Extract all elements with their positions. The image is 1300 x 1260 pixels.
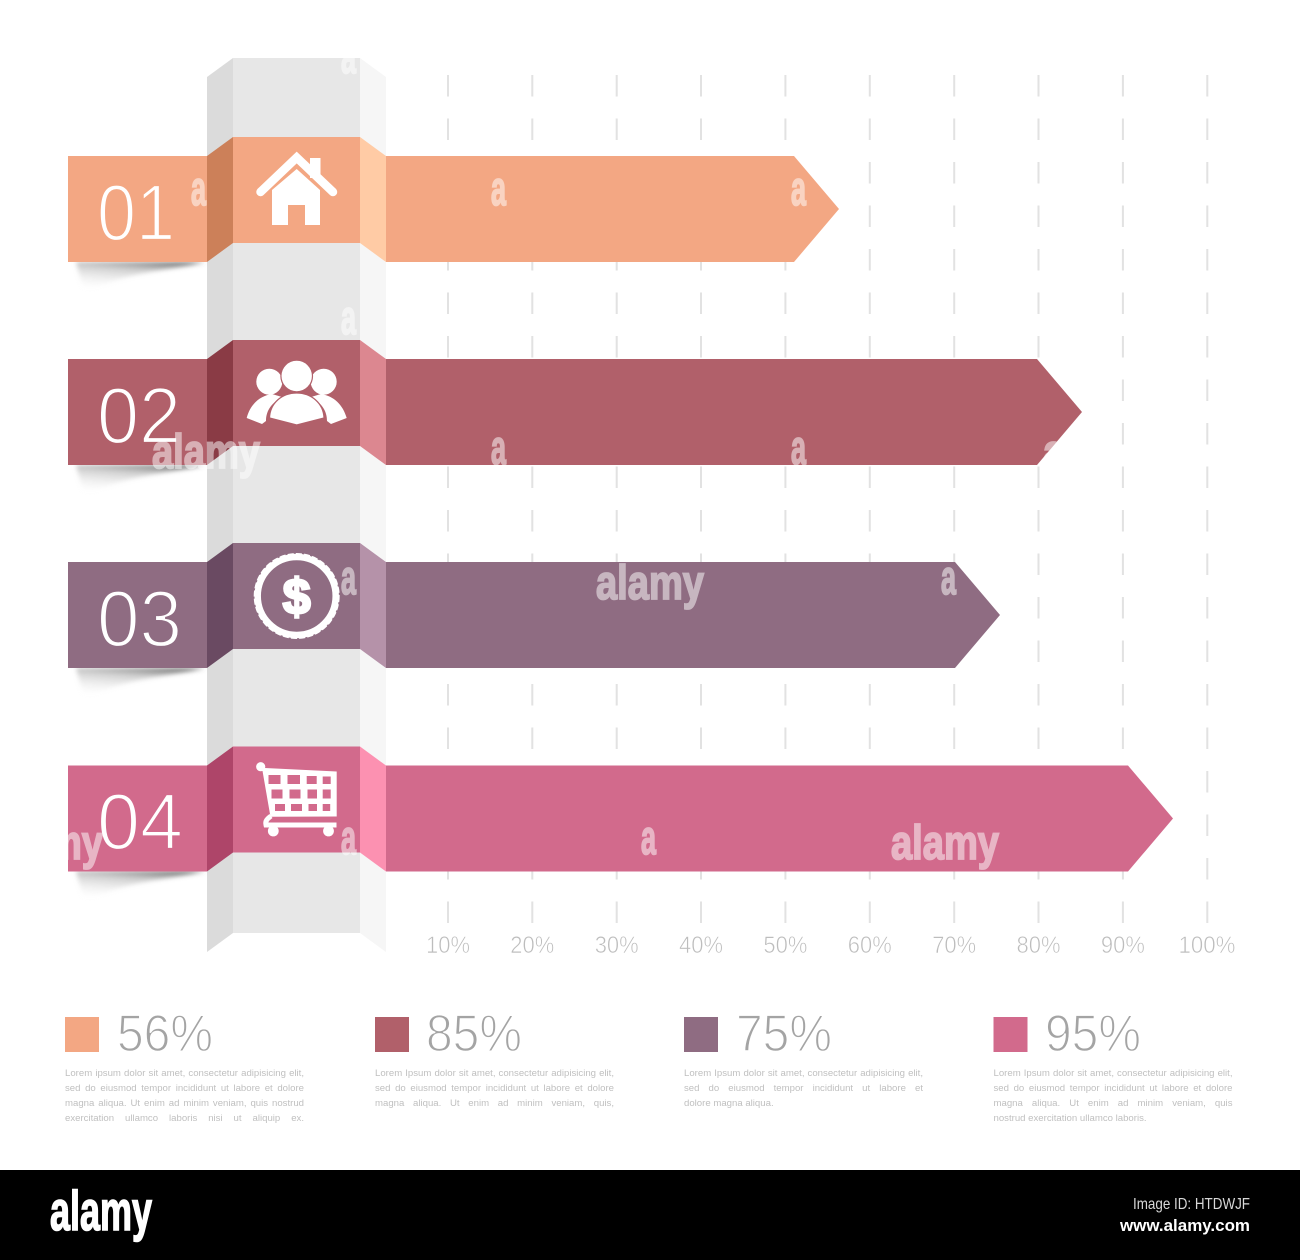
watermark overlay: alamy <box>596 557 704 610</box>
arrow bar 75% <box>386 562 1000 668</box>
icon panel <box>233 137 360 243</box>
text block: 56% description: Lorem ipsum dolor sit amet, consectetur adipisicing elit, <box>65 1068 304 1079</box>
watermark overlay: a <box>341 292 356 345</box>
text block: 95% description: Lorem Ipsum dolor sit amet, consectetur adipisicing elit, <box>994 1068 1232 1079</box>
text block: 75% description: sed do eiusmod tempor incididunt ut labore et <box>684 1083 923 1094</box>
number tab 03 <box>68 562 207 668</box>
icon panel <box>233 340 360 446</box>
text block: 56% description: magna aliqua. Ut enim ad minim veniam, quis nostrud <box>65 1098 304 1109</box>
watermark overlay: a <box>491 422 506 475</box>
watermark overlay: a <box>641 812 656 865</box>
shadow under ribbon 01 <box>76 262 205 292</box>
icon: house <box>260 158 333 225</box>
left fold <box>207 137 233 262</box>
text block: 56% description: exercitation ullamco laboris nisi ut aliquip ex. <box>65 1113 304 1124</box>
watermark overlay: a <box>191 163 206 216</box>
left fold <box>207 543 233 668</box>
arrow bar 56% <box>386 156 839 262</box>
watermark overlay: a <box>791 163 806 216</box>
arrow bar 85% <box>386 359 1082 465</box>
text block: 95% description: magna aliqua. Ut enim ad minim veniam, quis <box>994 1098 1232 1109</box>
watermark overlay: alamy <box>1043 426 1151 479</box>
text block: 95% description <box>994 1068 1232 1124</box>
number 02: 02 <box>97 371 181 460</box>
watermark overlay: alamy <box>891 817 999 870</box>
ribbon 04: 95% <box>68 746 1173 901</box>
image id: Image ID: HTDWJF <box>1133 1196 1250 1213</box>
text block: 75% description <box>684 1068 923 1109</box>
watermark overlay: a <box>341 31 356 84</box>
icon panel <box>233 543 360 649</box>
watermark overlay: a <box>791 422 806 475</box>
shadow under ribbon 03 <box>76 668 205 698</box>
legend 75%: 75% <box>736 1005 832 1063</box>
axis labels: 10% <box>426 932 470 959</box>
left fold <box>207 746 233 872</box>
icon: shopping cart <box>256 762 337 836</box>
text block: 56% description <box>65 1068 304 1124</box>
text block: 85% description: Lorem Ipsum dolor sit amet, consectetur adipisicing elit, <box>375 1068 614 1079</box>
legend swatches and values <box>65 1005 1141 1063</box>
icon: dollar coin <box>255 554 338 638</box>
legend 56% <box>65 1005 213 1063</box>
left fold <box>207 340 233 465</box>
legend 75% <box>684 1005 832 1063</box>
arrow bar 95% <box>386 766 1173 872</box>
axis labels: 70% <box>932 932 976 959</box>
axis labels: 60% <box>848 932 892 959</box>
watermark overlay: a <box>341 552 356 605</box>
shadow under ribbon 02 <box>76 465 205 495</box>
text block: 75% description: Lorem Ipsum dolor sit amet, consectetur adipisicing elit, <box>684 1068 923 1079</box>
axis labels: 100% <box>1178 932 1236 959</box>
right fold <box>360 746 386 872</box>
text block: 85% description <box>375 1068 614 1109</box>
text block: 56% description: sed do eiusmod tempor incididunt ut labore et dolore <box>65 1083 304 1094</box>
folded vertical column <box>207 58 386 952</box>
shadow under ribbon 04 <box>76 871 205 901</box>
text block: 95% description: sed do eiusmod tempor incididunt ut labore et dolore <box>994 1083 1232 1094</box>
site address: www.alamy.com <box>1119 1216 1250 1235</box>
axis labels: 50% <box>763 932 807 959</box>
watermark overlay: a <box>341 812 356 865</box>
legend 85%: 85% <box>426 1005 522 1063</box>
axis labels: 40% <box>679 932 723 959</box>
ribbon 03: 75% <box>68 543 1000 698</box>
right fold <box>360 340 386 465</box>
legend 95%: 95% <box>1045 1005 1141 1063</box>
footer logo: alamy <box>50 1179 152 1242</box>
icon panel <box>233 746 360 852</box>
right fold <box>360 543 386 668</box>
legend 56%: 56% <box>117 1005 213 1063</box>
text block: 75% description: dolore magna aliqua. <box>684 1098 774 1109</box>
legend 95% <box>994 1005 1141 1063</box>
number 03: 03 <box>97 574 182 663</box>
chart grid: dashed percent guides <box>448 75 1207 924</box>
icon: dollar coin: $ <box>283 569 311 625</box>
number 04: 04 <box>97 777 183 866</box>
axis labels: 90% <box>1101 932 1145 959</box>
icon: people <box>247 360 347 425</box>
text block: 95% description: nostrud exercitation ullamco laboris. <box>994 1113 1147 1124</box>
watermark overlay: a <box>941 552 956 605</box>
legend 85% <box>375 1005 522 1063</box>
axis labels: 20% <box>510 932 554 959</box>
watermark overlay: a <box>491 163 506 216</box>
axis labels <box>426 932 1236 959</box>
text block: 85% description: sed do eiusmod tempor incididunt ut labore et dolore <box>375 1083 614 1094</box>
axis labels: 80% <box>1016 932 1060 959</box>
number 01: 01 <box>97 168 175 257</box>
right fold <box>360 137 386 262</box>
number tab 04 <box>68 766 207 872</box>
text block: 85% description: magna aliqua. Ut enim ad minim veniam, quis, <box>375 1098 614 1109</box>
watermark overlay: alamy <box>152 426 260 479</box>
watermark overlay <box>68 58 1057 870</box>
footer bar <box>0 1170 1300 1260</box>
ribbon 01: 56% <box>68 137 839 292</box>
number tab 01 <box>68 156 207 262</box>
number tab 02 <box>68 359 207 465</box>
axis labels: 30% <box>595 932 639 959</box>
ribbon 02: 85% <box>68 340 1082 495</box>
